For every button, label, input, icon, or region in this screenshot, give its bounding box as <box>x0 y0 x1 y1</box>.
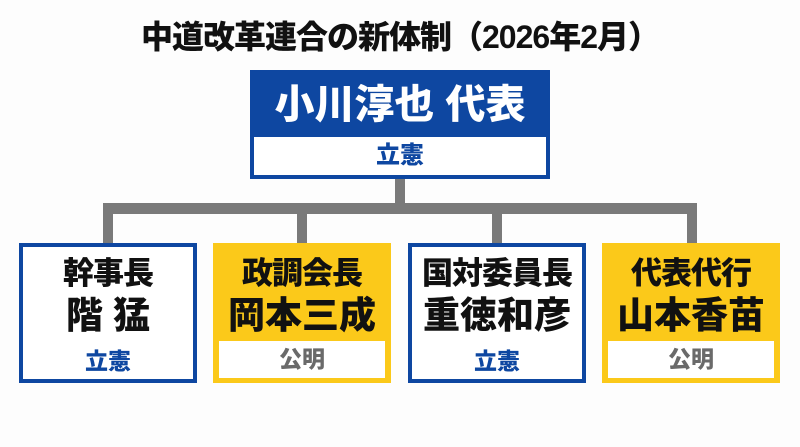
title: 中道改革連合の新体制（2026年2月） <box>141 19 659 55</box>
panel: secretary general: 階 猛 <box>66 295 150 336</box>
panel: policy chief <box>213 243 391 383</box>
panel: diet affairs: 立憲 <box>474 348 520 374</box>
panel: diet affairs: 国対委員長 <box>422 256 572 291</box>
leader name: 小川淳也 代表 <box>274 83 526 127</box>
panel: secretary general: 幹事長 <box>63 256 153 291</box>
leader party: 立憲 <box>376 142 424 169</box>
leader name <box>254 74 546 137</box>
panel: policy chief: 公明 <box>279 346 325 372</box>
panel: diet affairs <box>408 243 586 383</box>
panel: diet affairs: 重徳和彦 <box>423 295 571 336</box>
panel: leader <box>250 70 550 179</box>
panel: deputy leader: 公明 <box>668 346 714 372</box>
panel: secretary general <box>19 243 197 383</box>
panel: deputy leader: 山本香苗 <box>617 295 765 336</box>
panel: policy chief: 岡本三成 <box>228 295 376 336</box>
panel: deputy leader <box>602 243 780 383</box>
panel: deputy leader: 代表代行 <box>631 256 751 291</box>
panel: secretary general: 立憲 <box>85 348 131 374</box>
panel: policy chief: 政調会長 <box>242 256 362 291</box>
